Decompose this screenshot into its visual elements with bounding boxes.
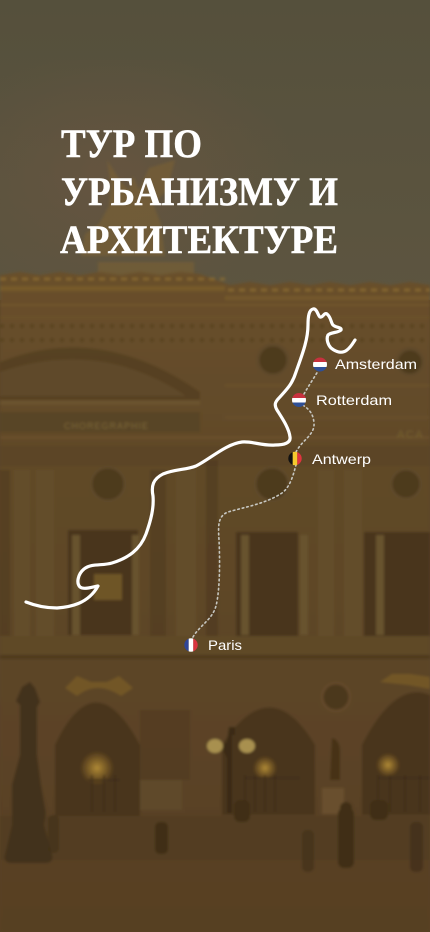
lit window — [94, 574, 122, 600]
background: sky — [0, 0, 430, 300]
marker: Antwerp — [288, 451, 371, 467]
columns — [14, 470, 384, 638]
title — [60, 121, 338, 262]
iron gates — [88, 775, 430, 812]
marker: Amsterdam: Amsterdam — [335, 356, 417, 372]
marker: Paris: Paris — [208, 637, 242, 653]
facade — [0, 272, 430, 932]
glowing lights — [80, 751, 114, 785]
balustrade — [0, 636, 430, 654]
marker: Amsterdam — [313, 358, 416, 372]
carved inscription band: CHOREGRAPHIE — [64, 421, 149, 431]
street steps — [0, 816, 430, 860]
title: ТУР ПО — [61, 121, 202, 166]
pedestrians — [48, 800, 423, 872]
lower arches — [55, 674, 430, 820]
window recesses — [0, 460, 430, 640]
rooftop statue — [81, 160, 194, 276]
marker: Rotterdam: Rotterdam — [316, 392, 392, 408]
title: АРХИТЕКТУРЕ — [60, 217, 338, 262]
lamp posts — [5, 682, 52, 863]
marker: Rotterdam — [292, 393, 391, 407]
cornice — [0, 279, 430, 290]
dotted route: Paris to Amsterdam — [193, 371, 318, 637]
marker: Paris — [184, 638, 242, 652]
medallions — [91, 345, 423, 501]
title: УРБАНИЗМУ И — [61, 169, 338, 214]
coastline: thick white line — [26, 309, 355, 608]
left pediment arch — [0, 347, 200, 400]
background: opera house photo: ACA — [397, 429, 424, 441]
marker: Antwerp: Antwerp — [312, 451, 371, 467]
